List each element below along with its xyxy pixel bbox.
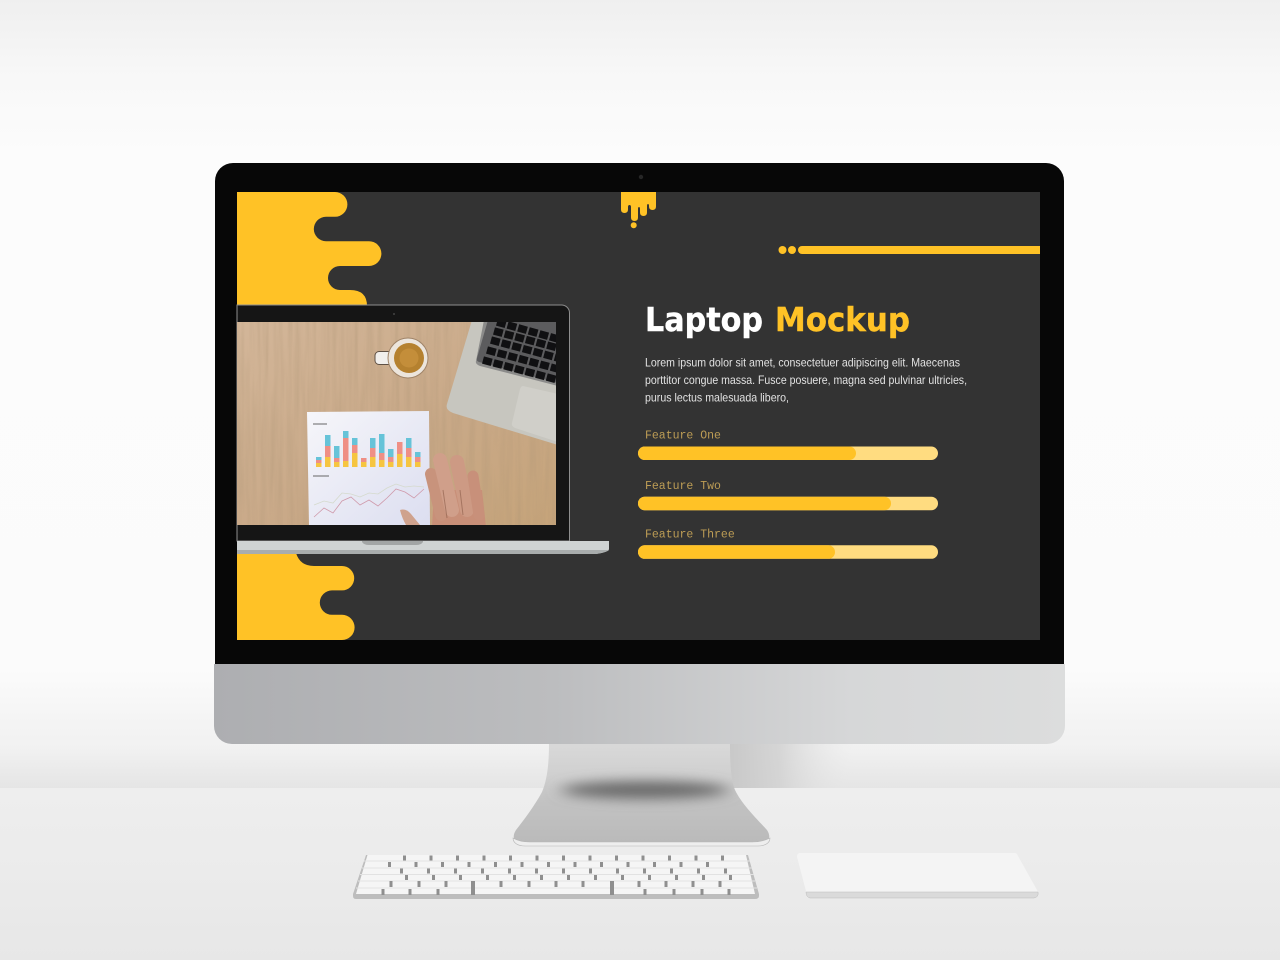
feature one [638,430,938,460]
label: feature one: Feature One [645,430,721,442]
body text: Lorem ipsum dolor sit amet, consectetuer adipiscing elit. Maecenas [645,356,960,370]
title word: Laptop: Laptop [645,300,763,339]
trackpad edge [806,892,1038,898]
label: feature three: Feature Three [645,528,735,542]
progress track two [638,497,938,510]
body text: purus lectus malesuada libero, [645,390,789,404]
blob: top-left yellow [237,192,381,306]
wood grain [238,322,520,525]
progress fill three [638,545,835,559]
blob: bottom-left yellow [237,553,355,640]
webcam [639,175,643,179]
keyboard edges [353,855,759,899]
laptop base lower edge [237,550,609,554]
background laptop [447,320,558,445]
trackpad surface [797,853,1038,893]
stand body [514,743,769,843]
wood desk [237,322,556,525]
body text [645,356,967,404]
body text: porttitor congue massa. Fusce posuere, magna sed pulvinar ultricies, [645,373,967,387]
icon: dripping yellow drops [621,192,656,228]
monitor bezel [215,163,1064,664]
laptop camera [393,313,395,315]
laptop lid [237,305,570,541]
keyboard body [353,855,759,899]
laptop hinge notch [362,541,423,545]
progress fill two [638,497,891,510]
keyboard key gaps [383,858,737,895]
hand [400,460,486,527]
slide background [237,192,1040,640]
feature three [638,528,938,559]
stand base edge highlight [513,838,770,846]
accent line with two dots [778,246,1040,254]
trackpad [797,853,1038,898]
feature two [638,480,938,510]
laptop screen photo [237,320,558,527]
report heading text lines [313,424,329,476]
title [645,300,910,339]
background: desk [0,788,1280,960]
laptop mockup [237,305,609,554]
keyboard row lines [356,861,757,888]
progress fill one [638,446,856,460]
monitor shadow on wall [729,744,854,788]
line chart [314,484,424,517]
keyboard [353,855,759,899]
stacked bar chart [316,431,420,467]
label: feature two: Feature Two [645,480,721,493]
paper report [307,411,430,525]
monitor chin [214,664,1065,744]
progress track one [638,446,938,460]
title word: Mockup: Mockup [775,300,910,339]
coffee cup [375,338,428,378]
monitor stand [513,743,770,846]
slide panel [237,192,1040,640]
laptop base [237,541,609,554]
stand shadow band [561,781,729,799]
progress track three [638,545,938,559]
